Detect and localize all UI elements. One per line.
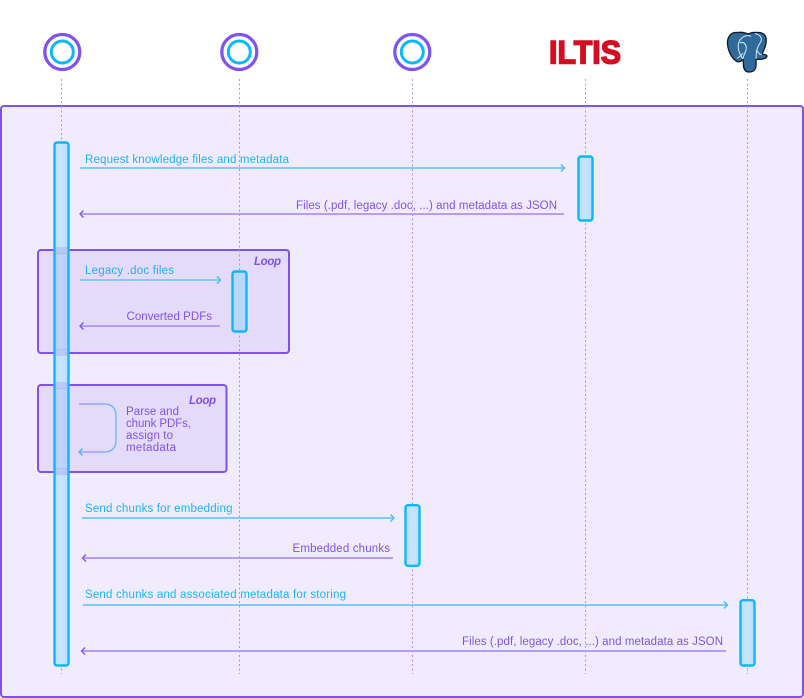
message: request knowledge files: Request knowledge files and metadata — [85, 154, 290, 166]
self loop text — [126, 406, 191, 454]
message: send chunks for embedding: Send chunks for embedding — [85, 503, 232, 515]
icon: PostgreSQL elephant — [727, 32, 767, 72]
message: legacy doc files — [80, 265, 220, 284]
loop 2 label: Loop — [189, 395, 216, 407]
message: files as JSON: Files (.pdf, legacy .doc, ...) and metadata as JSON — [296, 200, 557, 212]
message: embedded chunks — [82, 543, 393, 562]
activation: embedder — [406, 505, 420, 566]
self loop text: assign to — [126, 430, 173, 442]
message: legacy doc files: Legacy .doc files — [85, 265, 174, 277]
message: converted PDFs: Converted PDFs — [126, 311, 212, 323]
icon: actor 1 — [45, 34, 80, 70]
activation: PostgreSQL — [740, 600, 754, 666]
loop box 1 — [38, 250, 289, 353]
activation: main actor — [54, 142, 68, 666]
message: files as JSON — [80, 200, 564, 218]
lifelines — [62, 79, 748, 674]
message: files as JSON from store — [82, 636, 726, 654]
logo: ILTIS: ILTIS — [549, 34, 621, 70]
self loop text: Parse and — [126, 406, 179, 418]
activation: converter — [232, 272, 246, 332]
message: converted PDFs — [80, 311, 220, 330]
message: self loop parse and chunk — [79, 404, 191, 456]
loop 1 label: Loop — [254, 256, 281, 268]
activation: ILTIS — [578, 156, 592, 220]
message: files as JSON from store: Files (.pdf, legacy .doc, ...) and metadata as JSON — [462, 636, 723, 648]
loop box 2 — [38, 385, 226, 472]
icon: actor 2 — [222, 34, 257, 70]
message: embedded chunks: Embedded chunks — [292, 543, 390, 555]
message: send chunks for embedding — [82, 503, 394, 522]
self loop text: chunk PDFs, — [126, 418, 191, 430]
message: request knowledge files — [80, 154, 564, 172]
message: send chunks and metadata for storing: Send chunks and associated metadata for storing — [85, 589, 346, 601]
message: send chunks and metadata for storing — [83, 589, 728, 608]
self loop text: metadata — [126, 442, 177, 454]
icon: actor 3 — [395, 34, 430, 70]
